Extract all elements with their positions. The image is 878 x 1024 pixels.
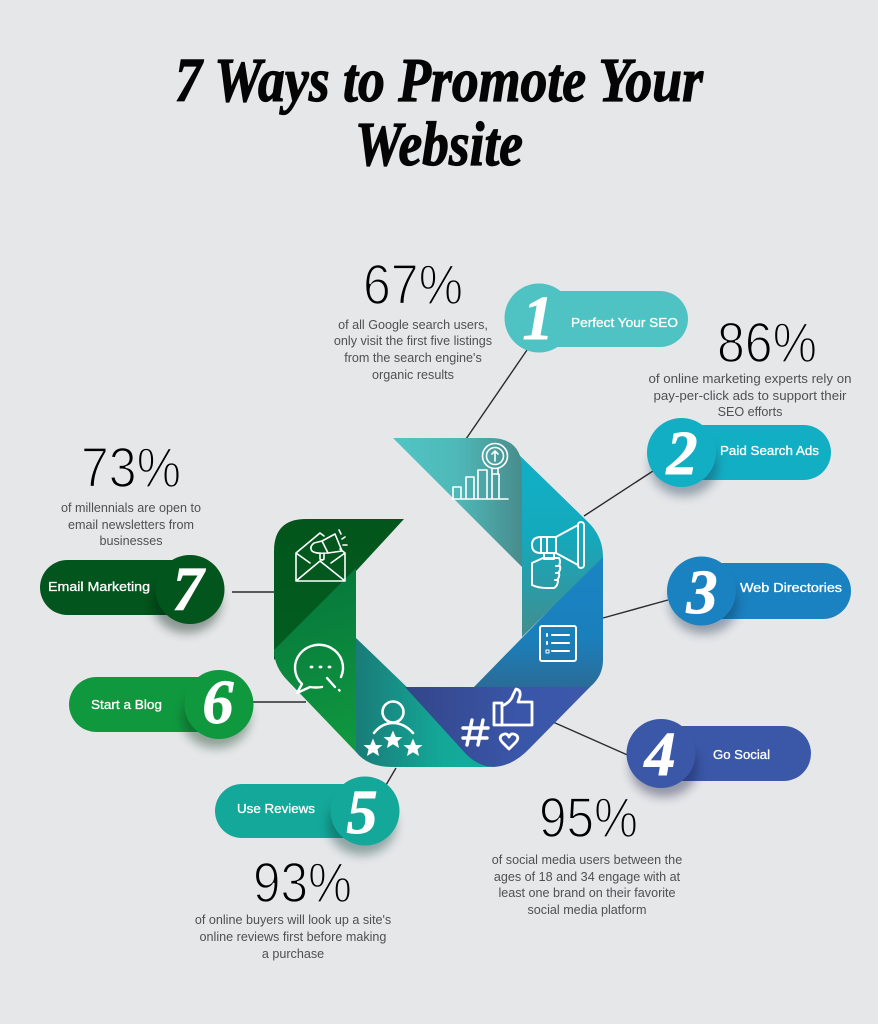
stat: 67%: organic results <box>372 368 454 382</box>
callout 4: Go Social <box>626 719 811 797</box>
stat: 86%: pay-per-click ads to support their <box>654 389 846 403</box>
stat: 73%: businesses <box>99 534 163 548</box>
stat: 93% <box>195 851 391 961</box>
callout 1: Perfect Your SEO <box>504 284 688 353</box>
callout 7: Email Marketing <box>40 555 224 633</box>
callout 5: Use Reviews: Use Reviews <box>237 801 316 816</box>
stat: 93%: 93% <box>253 851 352 915</box>
segment 3: blue <box>474 555 603 687</box>
stat: 67%: from the search engine's <box>344 351 482 365</box>
stat: 86% <box>648 311 852 419</box>
callout 3: Web Directories: 3 <box>686 559 718 627</box>
icon: bar chart with magnifier <box>452 444 508 499</box>
icon: speech bubble with pencil <box>295 645 343 693</box>
callout 3: Web Directories: Web Directories <box>740 580 843 595</box>
stat: 95%: least one brand on their favorite <box>498 886 676 900</box>
stat: 73%: 73% <box>81 436 181 500</box>
octagon ring diagram <box>274 438 603 767</box>
stat: 86%: SEO efforts <box>718 405 782 419</box>
callout 7: Email Marketing: 7 <box>172 556 206 624</box>
icon: like, hashtag and heart <box>463 689 532 749</box>
callout 5: Use Reviews <box>215 776 400 855</box>
stat: 95% <box>492 786 682 917</box>
stat: 73%: email newsletters from <box>68 518 194 532</box>
segment 7: dark green <box>274 519 404 660</box>
callout 2: Paid Search Ads: 2 <box>666 420 698 488</box>
callout 1: Perfect Your SEO: 1 <box>522 285 554 353</box>
title: Website <box>355 111 523 179</box>
callout 6: Start a Blog: 6 <box>202 669 234 737</box>
stat: 67% <box>334 253 492 382</box>
segment 6: green <box>274 568 356 752</box>
title <box>175 47 704 179</box>
segment 2: cyan <box>510 446 603 637</box>
callout 5: Use Reviews: 5 <box>346 779 378 847</box>
stat: 93%: of online buyers will look up a site's <box>195 913 391 927</box>
icon: envelope with megaphone <box>296 530 347 581</box>
callout 2: Paid Search Ads: Paid Search Ads <box>720 443 820 458</box>
segment 4: indigo <box>405 687 590 767</box>
stat: 73%: of millennials are open to <box>61 501 201 515</box>
callout 3: Web Directories <box>667 556 851 634</box>
callout 4: Go Social: 4 <box>644 721 676 789</box>
stat: 67%: of all Google search users, <box>338 318 488 332</box>
callout 6: Start a Blog <box>69 669 254 748</box>
stat: 95%: social media platform <box>528 903 646 917</box>
stat: 67%: 67% <box>363 253 463 317</box>
icon: directory list <box>540 626 576 661</box>
stat: 95%: 95% <box>539 786 638 850</box>
callout 7: Email Marketing: Email Marketing <box>48 579 150 594</box>
callout 2: Paid Search Ads <box>647 418 831 496</box>
stat: 95%: of social media users between the <box>492 853 682 867</box>
icon: user with three stars <box>364 702 422 756</box>
stat: 93%: online reviews first before making <box>200 930 386 944</box>
segment 5: teal <box>356 638 490 767</box>
icon: megaphone in hand <box>532 522 584 588</box>
segment 1: light teal <box>393 438 522 567</box>
stat: 86%: of online marketing experts rely on <box>648 372 852 386</box>
stat: 95%: ages of 18 and 34 engage with at <box>494 870 681 884</box>
stat: 67%: only visit the first five listings <box>334 334 492 348</box>
stat: 73% <box>61 436 201 548</box>
callout 6: Start a Blog: Start a Blog <box>91 697 162 712</box>
title: 7 Ways to Promote Your <box>175 47 704 115</box>
stat: 93%: a purchase <box>262 947 324 961</box>
stat: 86%: 86% <box>717 311 817 375</box>
callout 4: Go Social: Go Social <box>713 747 770 762</box>
connector lines <box>232 350 668 785</box>
callout 1: Perfect Your SEO: Perfect Your SEO <box>571 315 678 330</box>
